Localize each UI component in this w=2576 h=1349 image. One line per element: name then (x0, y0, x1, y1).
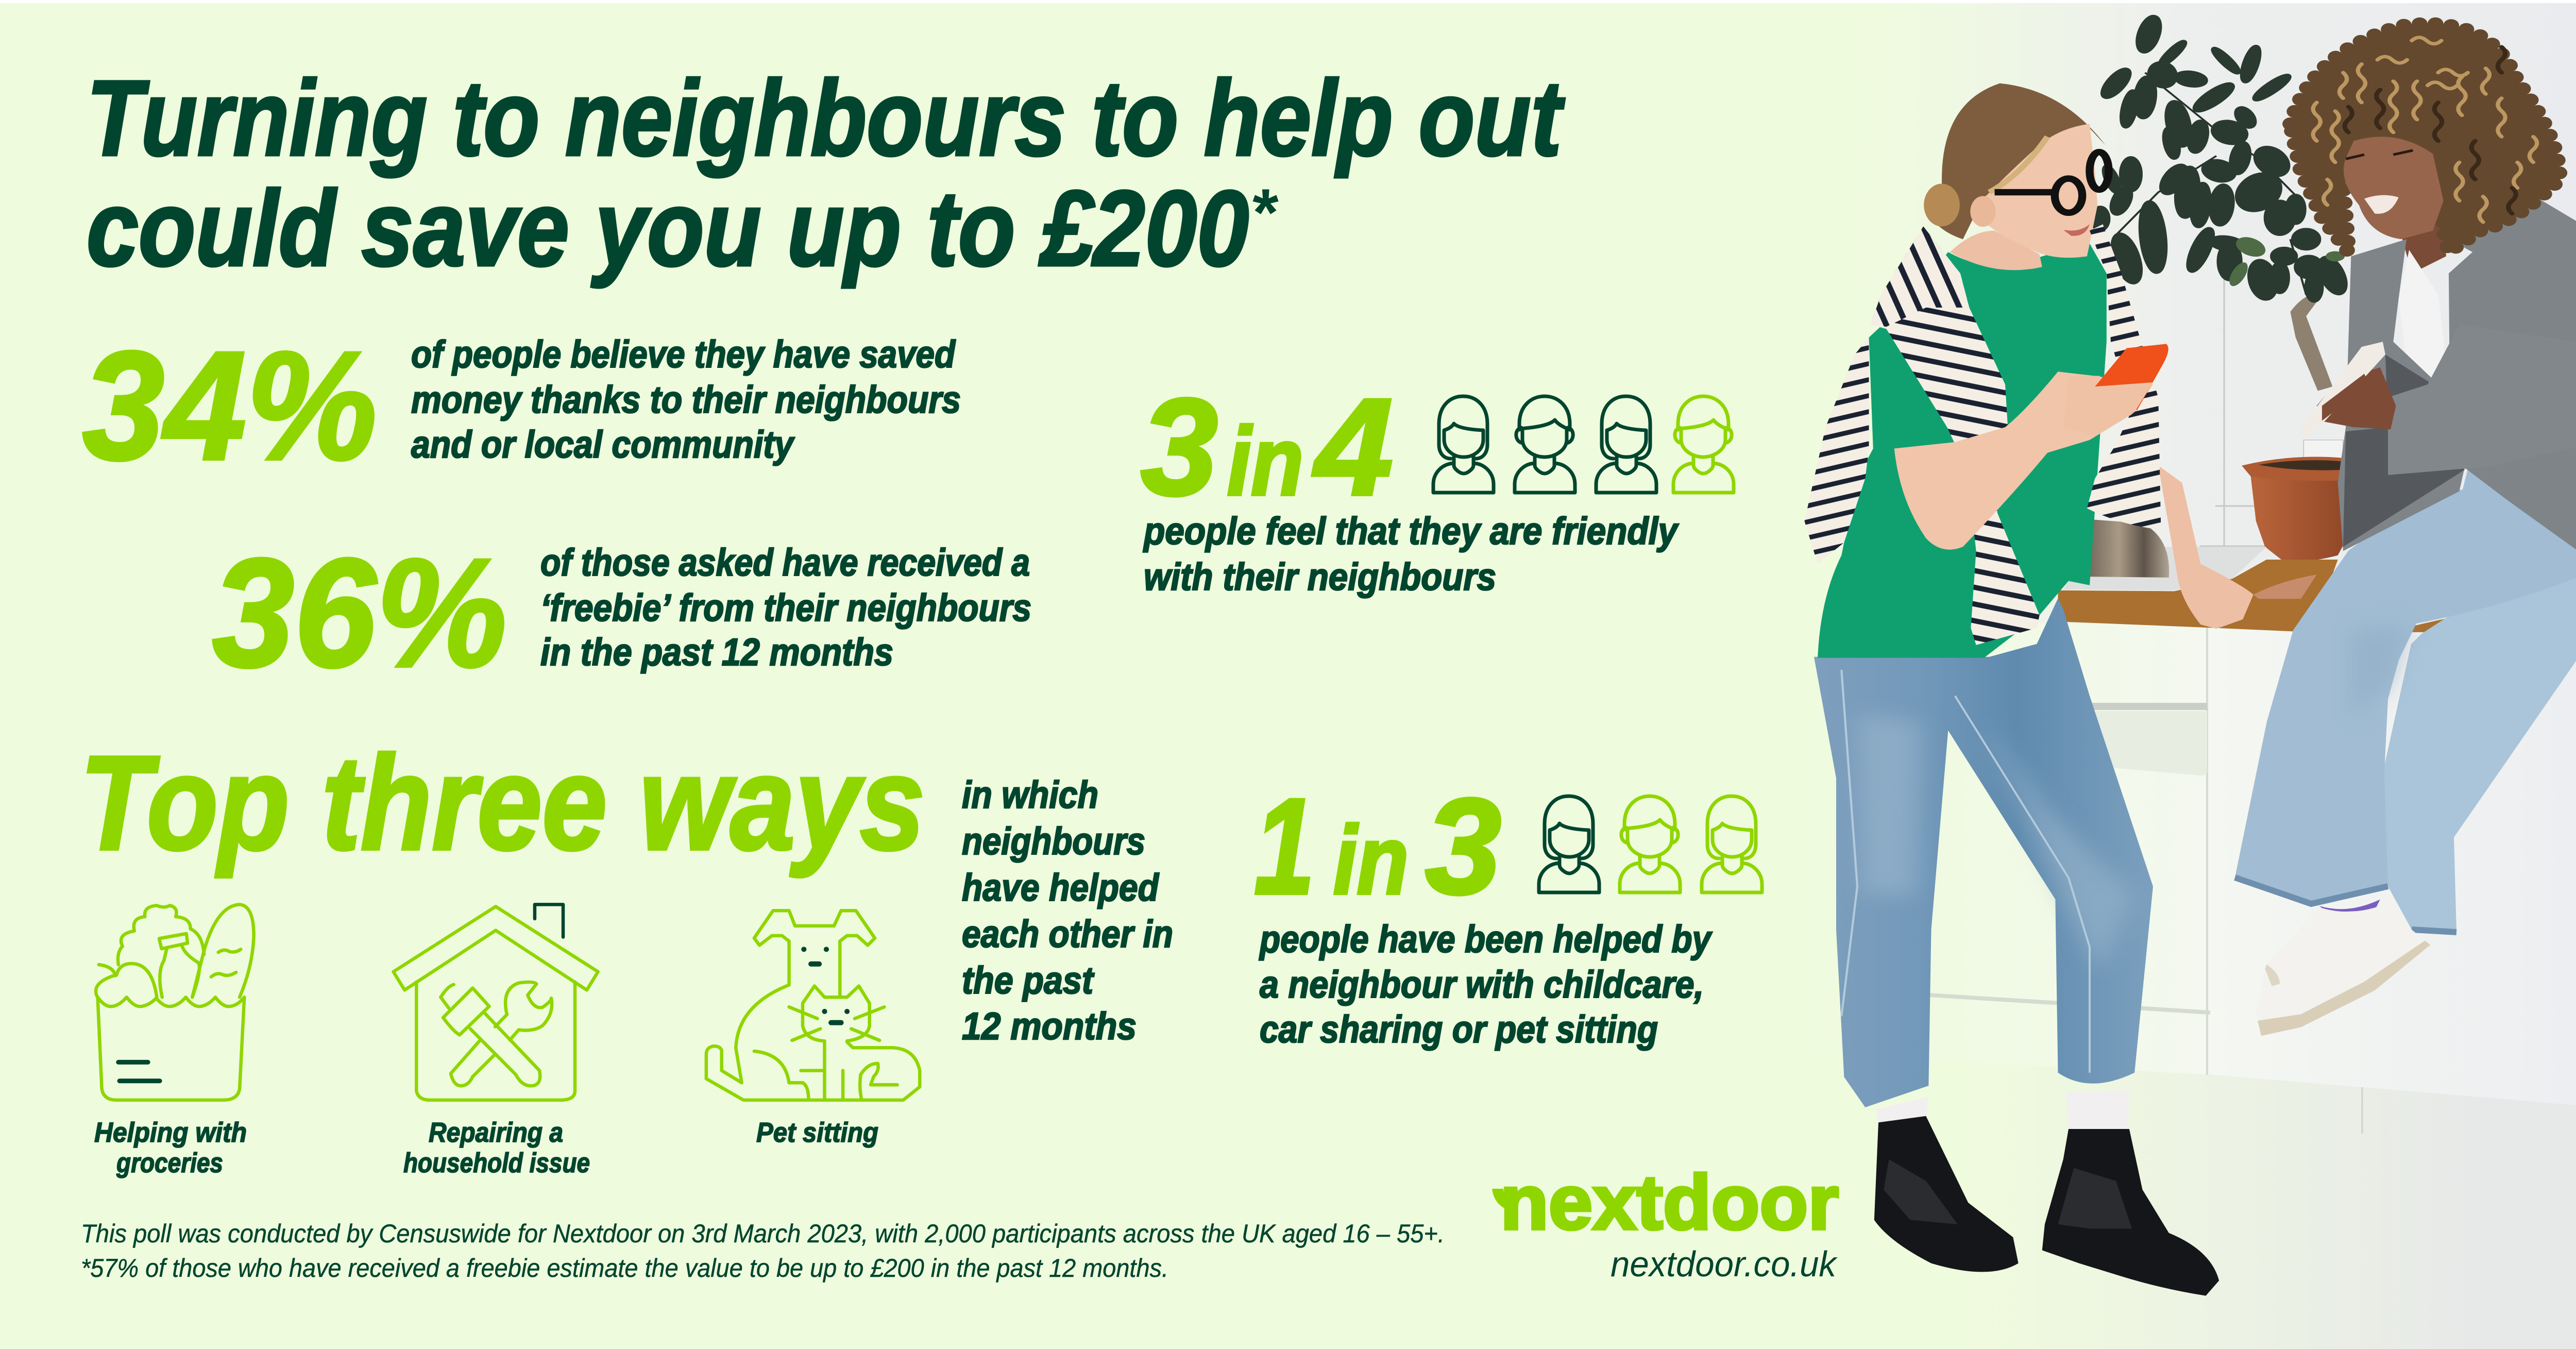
footnote: This poll was conducted by Censuswide for Nextdoor on 3rd March 2023, with 2,000 participants across the UK aged 16 – 55+. (81, 1219, 1445, 1248)
footnote (81, 1219, 1445, 1283)
figure: in (1333, 806, 1409, 914)
description (1259, 918, 1713, 1051)
description: a neighbour with childcare, (1260, 963, 1704, 1006)
hob (2063, 547, 2266, 591)
hair (2291, 24, 2560, 252)
description: and or local community (411, 423, 795, 466)
shirt (2399, 250, 2450, 395)
text block: in which neighbours have helped: the past (962, 959, 1095, 1002)
description (1143, 510, 1680, 598)
sweater: shoulder and front band (1871, 226, 2040, 645)
dark curls (2345, 47, 2516, 213)
right boot highlight (2058, 1168, 2132, 1228)
tile lines (2200, 273, 2267, 546)
hand of right woman on worktop (2253, 575, 2317, 599)
label: repairing a household issue (403, 1117, 590, 1178)
description: money thanks to their neighbours (411, 378, 961, 421)
figure (1141, 369, 1393, 524)
jeans hem (2235, 878, 2456, 932)
hand (2317, 367, 2396, 429)
photo backdrop: right cabinets (2210, 623, 2576, 1105)
figure: 36% (212, 526, 507, 699)
hair highlight (1989, 137, 2047, 192)
label: repairing a household issue: Repairing a (429, 1117, 563, 1148)
text block: in which neighbours have helped: in which (962, 773, 1098, 816)
arm (1894, 372, 2153, 550)
jeans: front leg (2235, 469, 2576, 904)
icon: house with tools (394, 904, 598, 1100)
text block: in which neighbours have helped: each other in (962, 913, 1173, 955)
stat: 3 in 4 (1141, 369, 1734, 598)
phone (2095, 344, 2168, 410)
jeans seams (1841, 670, 2090, 1073)
description: ‘freebie’ from their neighbours (540, 586, 1031, 629)
title: could save you up to £200 (87, 169, 1249, 289)
icon: four people, three highlighted (1433, 396, 1734, 493)
fingers (2322, 374, 2369, 421)
figure: 4 (1310, 369, 1393, 524)
jeans shading (2349, 623, 2411, 721)
phone (2298, 342, 2385, 438)
logo: nextdoor: nextdoor (1500, 1159, 1839, 1245)
heading: top three ways: Top three ways (80, 729, 925, 879)
jeans (1814, 598, 2219, 1296)
photo backdrop: floor (1752, 1051, 2576, 1349)
text block: in which neighbours have helped: 12 months (962, 1005, 1137, 1048)
plant branches (2116, 73, 2306, 295)
logo hook on the n (1492, 1189, 1511, 1211)
description: with their neighbours (1144, 555, 1496, 598)
eyes (2346, 150, 2413, 159)
blazer sleeve (2388, 325, 2576, 475)
stat: 34% (82, 319, 961, 492)
footnote: *57% of those who have received a freebie estimate the value to be up to £200 in the past 12 months. (81, 1254, 1168, 1283)
sweater: right sleeve (2087, 224, 2161, 530)
description (411, 333, 961, 466)
plant trunk (2291, 294, 2333, 391)
description: of those asked have received a (540, 541, 1030, 584)
hair (1926, 83, 2106, 239)
figure (1254, 770, 1501, 923)
right forearm and hand on worktop (2158, 466, 2253, 629)
icon: dog and cat (706, 910, 920, 1100)
label: pet sitting: Pet sitting (756, 1117, 878, 1148)
photo: two neighbours looking at phones in a kitchen (1752, 3, 2576, 1349)
left woman (1804, 83, 2317, 1296)
website: nextdoor.co.uk (1611, 1244, 1838, 1284)
stat: 36% (212, 526, 1031, 699)
photo backdrop: tiled wall (1752, 3, 2576, 627)
figure: 34% (82, 319, 377, 492)
description: of people believe they have saved (411, 333, 956, 376)
label: repairing a household issue: household issue (403, 1148, 590, 1178)
icon: three people, one highlighted (1539, 796, 1762, 892)
jeans fading (1857, 713, 2132, 973)
neck (2401, 205, 2446, 274)
text block: in which neighbours have helped (962, 773, 1173, 1048)
text block: in which neighbours have helped: have helped (962, 866, 1160, 909)
icon: grocery bag (96, 904, 254, 1100)
neck (1950, 231, 2042, 270)
figure: 3 (1141, 369, 1218, 524)
figure: 3 (1425, 770, 1501, 923)
mouth (2364, 195, 2399, 214)
title: Turning to neighbours to help out (87, 59, 1565, 178)
plant leaves (2092, 15, 2350, 301)
t-shirt (1818, 244, 2107, 658)
glasses (1995, 152, 2109, 213)
left boot highlight (1884, 1159, 1958, 1224)
description (540, 541, 1031, 673)
sweater: hanging left side (1804, 329, 1876, 564)
description: in the past 12 months (540, 631, 893, 673)
mouth (2063, 224, 2090, 236)
worktop (2058, 560, 2338, 632)
right woman (2235, 24, 2576, 1036)
shoe (2256, 891, 2430, 1036)
label: helping with groceries: groceries (116, 1148, 223, 1178)
cabinet door details (1921, 627, 2362, 1134)
left boot (1874, 1116, 2019, 1272)
description: people have been helped by (1259, 918, 1713, 960)
blazer (2338, 192, 2576, 551)
title (87, 59, 1565, 289)
hair bun (1924, 183, 1960, 226)
stat: 1 in 3 (1254, 770, 1762, 1051)
socks (1876, 1097, 1928, 1124)
description: people feel that they are friendly (1143, 510, 1680, 552)
plant pot (2242, 457, 2353, 562)
curls (2313, 38, 2537, 222)
description: car sharing or pet sitting (1260, 1008, 1658, 1051)
right boot (2042, 1129, 2219, 1296)
figure: in (1227, 407, 1303, 515)
label: helping with groceries: Helping with (94, 1117, 247, 1148)
white top edge (0, 0, 2576, 3)
ear (1970, 196, 1996, 227)
kitchen scene behind the people (2058, 15, 2465, 632)
photo backdrop: left cabinets (1752, 623, 2214, 1077)
fingers (2063, 376, 2153, 436)
blazer interior (2343, 355, 2465, 547)
wall socket (2303, 440, 2343, 461)
face (1981, 124, 2097, 258)
face (2344, 137, 2444, 239)
jeans: back leg (2383, 562, 2576, 932)
label: helping with groceries (94, 1117, 247, 1178)
figure: 1 (1254, 770, 1315, 923)
kettle (2086, 478, 2182, 578)
title: * (1250, 175, 1279, 250)
text block: in which neighbours have helped: neighbours (962, 820, 1145, 863)
